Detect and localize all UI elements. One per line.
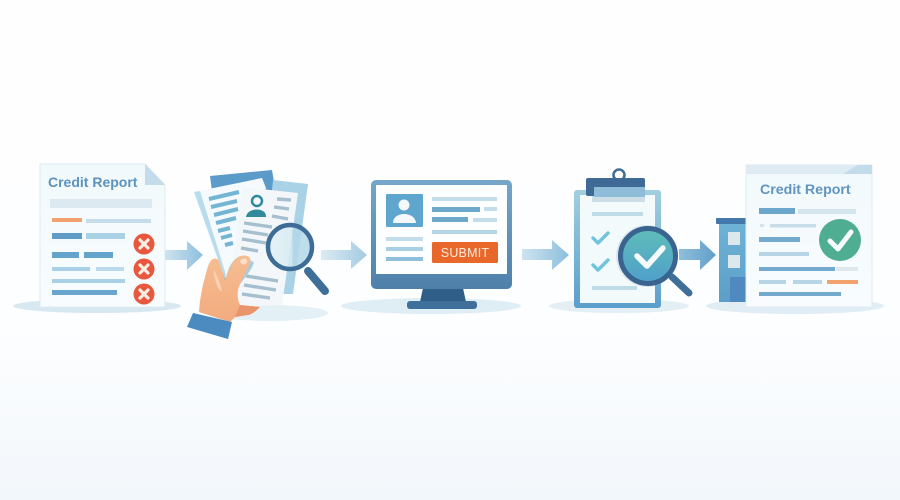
arrow 2 <box>321 241 367 269</box>
folded corner <box>145 164 165 185</box>
magnifier with check <box>616 225 689 293</box>
checklist <box>592 212 643 290</box>
resume lines <box>241 199 291 298</box>
step 1: credit report with errors <box>13 164 181 313</box>
arrow 4 <box>679 240 716 270</box>
ground shadow <box>13 299 181 313</box>
document <box>746 165 872 307</box>
portrait icon <box>246 196 266 217</box>
document header strip <box>746 165 872 174</box>
monitor stand <box>420 288 466 302</box>
back blue sheet <box>210 170 293 298</box>
step 3: computer monitor with submit form <box>341 180 521 314</box>
magnifier <box>268 225 325 291</box>
shirt cuff <box>187 313 232 339</box>
back light sheet <box>262 180 308 294</box>
thumb shadow <box>226 256 254 284</box>
left sheet <box>194 178 266 280</box>
ground shadow <box>706 298 884 314</box>
heading: Credit Report: Credit Report <box>48 174 138 190</box>
profile picture <box>386 194 423 227</box>
ground shadow <box>549 299 689 313</box>
heading: Credit Report: Credit Report <box>760 182 851 198</box>
clipboard clip <box>586 170 645 202</box>
submit button <box>432 242 498 263</box>
verified check icon <box>819 219 861 261</box>
step 2: hand holding documents under magnifier <box>187 170 328 339</box>
ground shadow <box>212 305 328 321</box>
monitor body <box>371 180 512 289</box>
left sheet lines <box>209 192 239 245</box>
ground shadow <box>341 298 521 314</box>
error icons <box>134 234 154 304</box>
clipboard paper <box>580 195 655 303</box>
arrow 3 <box>522 240 569 270</box>
report lines <box>759 208 858 296</box>
step 5: corrected credit report with bank building <box>706 165 884 314</box>
monitor screen <box>376 185 507 274</box>
arrow 1 <box>165 241 203 270</box>
resume sheet <box>233 187 298 307</box>
clipboard board <box>574 190 661 308</box>
submit button: SUBMIT <box>441 246 489 260</box>
form lines <box>386 197 497 261</box>
document <box>40 164 165 307</box>
hand <box>199 256 260 322</box>
step 4: clipboard review <box>549 170 716 313</box>
report lines <box>50 199 152 295</box>
building <box>716 218 747 302</box>
